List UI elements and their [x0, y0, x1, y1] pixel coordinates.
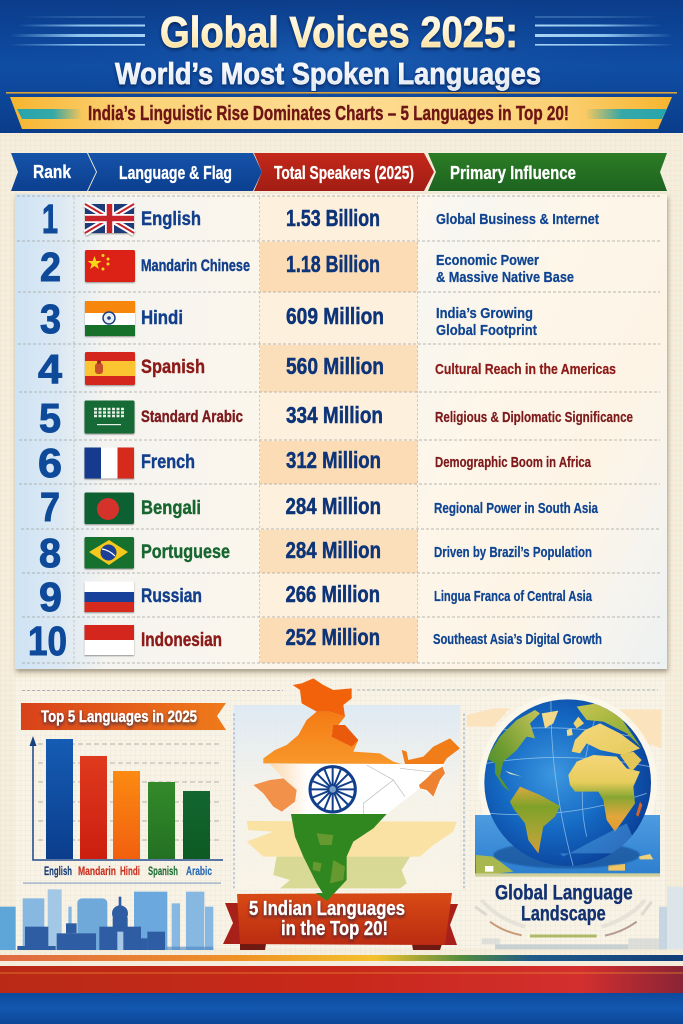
- row 6: French: 312 Million: [286, 447, 381, 473]
- Ashoka chakra: [310, 767, 355, 812]
- row 9: Russian: Lingua Franca of Central Asia: [434, 588, 592, 605]
- row 3: Hindi: Hindi: [141, 308, 183, 329]
- India map panel: [233, 678, 464, 901]
- chart heading ribbon: [21, 703, 226, 730]
- row 10: Indonesian: 10: [28, 618, 67, 664]
- row 7: Bengali: [40, 484, 598, 530]
- bar labels: Arabic: [186, 864, 212, 878]
- row 10: Indonesian: 252 Million: [286, 624, 380, 650]
- row 1: English: Global Business & Internet: [436, 211, 599, 228]
- row 4: Spanish: 4: [38, 346, 62, 392]
- chart heading ribbon: Top 5 Languages in 2025: [41, 707, 197, 726]
- header cell: language and flag: [88, 153, 262, 191]
- flag: Bangladesh: [84, 492, 134, 524]
- flag: Russia: [84, 582, 134, 612]
- row 9: Russian: 266 Million: [286, 581, 380, 607]
- row 5: Standard Arabic: 5: [39, 395, 61, 441]
- header cell: total speakers: Total Speakers (2025): [274, 163, 414, 183]
- globe label: [495, 881, 633, 926]
- globe: [484, 699, 651, 867]
- header cell: language and flag: Language & Flag: [119, 163, 232, 183]
- header band: [0, 0, 683, 133]
- flag: India: [85, 301, 135, 336]
- table panel: [15, 194, 667, 669]
- flag: France: [84, 448, 134, 478]
- row 5: Standard Arabic: [39, 395, 633, 441]
- row 4: Spanish: Cultural Reach in the Americas: [435, 361, 616, 378]
- bar chart panel: [21, 703, 226, 884]
- callout ribbon: Indian languages: 5 Indian Languages: [249, 898, 405, 920]
- globe panel: [464, 693, 683, 949]
- bar labels: Spanish: [148, 864, 178, 878]
- bars: [46, 739, 210, 859]
- row 2: Mandarin Chinese: [40, 244, 574, 290]
- yellow watercolor washes: [247, 821, 457, 888]
- map base under globe: [475, 815, 660, 877]
- row 1: English: 1.53 Billion: [286, 205, 380, 231]
- pixel fade strip: [482, 887, 683, 949]
- row 8: Portuguese: Portuguese: [141, 542, 230, 563]
- row 3: Hindi: 3: [40, 296, 61, 342]
- bar labels: English: [44, 864, 72, 878]
- row 3: Hindi: 609 Million: [286, 303, 384, 329]
- chart grid lines: [38, 744, 222, 840]
- globe label: Landscape: [521, 903, 606, 926]
- bar labels: [44, 864, 212, 878]
- flag: United Kingdom: [85, 204, 134, 233]
- row 8: Portuguese: [39, 530, 592, 576]
- bar labels: Mandarin: [78, 864, 116, 878]
- bar labels: Hindi: [120, 864, 140, 878]
- header cell: rank: [11, 153, 96, 191]
- chart axes: [30, 736, 223, 860]
- row 9: Russian: [39, 574, 592, 620]
- table header: [11, 153, 667, 191]
- flag: Indonesia: [84, 625, 134, 655]
- flag: China: [85, 250, 135, 282]
- header cell: rank: Rank: [33, 162, 72, 182]
- row 2: Mandarin Chinese: 1.18 Billion: [286, 251, 380, 277]
- row 2: Mandarin Chinese: 2: [40, 244, 61, 290]
- title: World’s Most Spoken Languages: [115, 56, 541, 91]
- header cell: primary influence: Primary Influence: [450, 163, 576, 183]
- row 7: Bengali: 284 Million: [286, 493, 381, 519]
- row 6: French: Demographic Boom in Africa: [435, 454, 591, 471]
- globe label: Global Language: [495, 881, 633, 904]
- row 2: Mandarin Chinese: & Massive Native Base: [436, 269, 574, 286]
- decorative header lines: left: [10, 16, 145, 46]
- row 1: English: [42, 196, 599, 242]
- section divider dashes: [22, 689, 658, 692]
- flag: Brazil: [84, 537, 134, 568]
- decorative arcs: [475, 900, 652, 936]
- row 9: Russian: Russian: [141, 586, 202, 607]
- title: Global Voices 2025:: [160, 8, 518, 57]
- row 10: Indonesian: [28, 618, 602, 664]
- row 8: Portuguese: 284 Million: [286, 537, 381, 563]
- row 2: Mandarin Chinese: Mandarin Chinese: [141, 256, 250, 275]
- row 10: Indonesian: Southeast Asia’s Digital Growth: [433, 631, 602, 648]
- header cell: primary influence: [428, 153, 667, 191]
- row 5: Standard Arabic: 334 Million: [286, 402, 383, 428]
- row 6: French: 6: [38, 440, 62, 486]
- title: [115, 8, 541, 91]
- row 8: Portuguese: Driven by Brazil’s Population: [434, 544, 592, 561]
- callout ribbon: Indian languages: [223, 893, 458, 950]
- row 5: Standard Arabic: Standard Arabic: [141, 407, 243, 426]
- row 7: Bengali: Regional Power in South Asia: [434, 500, 598, 517]
- map of India: [253, 678, 460, 901]
- row 2: Mandarin Chinese: Economic Power: [436, 252, 539, 269]
- row 6: French: [38, 440, 591, 486]
- row 6: French: French: [141, 452, 195, 473]
- subtitle banner: [6, 92, 677, 129]
- bottom stripes: [0, 955, 683, 1024]
- row 3: Hindi: Global Footprint: [436, 322, 537, 339]
- row 4: Spanish: [38, 346, 616, 392]
- row 3: Hindi: [40, 296, 537, 342]
- row 3: Hindi: India’s Growing: [436, 305, 533, 322]
- row 7: Bengali: Bengali: [141, 498, 201, 519]
- row 9: Russian: 9: [39, 574, 62, 620]
- row 4: Spanish: 560 Million: [286, 353, 384, 379]
- callout ribbon: Indian languages: in the Top 20!: [281, 918, 388, 940]
- decorative header lines: right: [535, 16, 675, 46]
- flag: Saudi Arabia: [84, 400, 134, 434]
- flag: Spain: [85, 352, 135, 385]
- header cell: total speakers: [254, 153, 434, 191]
- row 1: English: English: [141, 209, 201, 230]
- row 10: Indonesian: Indonesian: [141, 630, 222, 651]
- skyline: [0, 889, 213, 950]
- row 7: Bengali: 7: [40, 484, 60, 530]
- row 1: English: 1: [42, 196, 58, 242]
- row 4: Spanish: Spanish: [141, 357, 205, 378]
- row 8: Portuguese: 8: [39, 530, 61, 576]
